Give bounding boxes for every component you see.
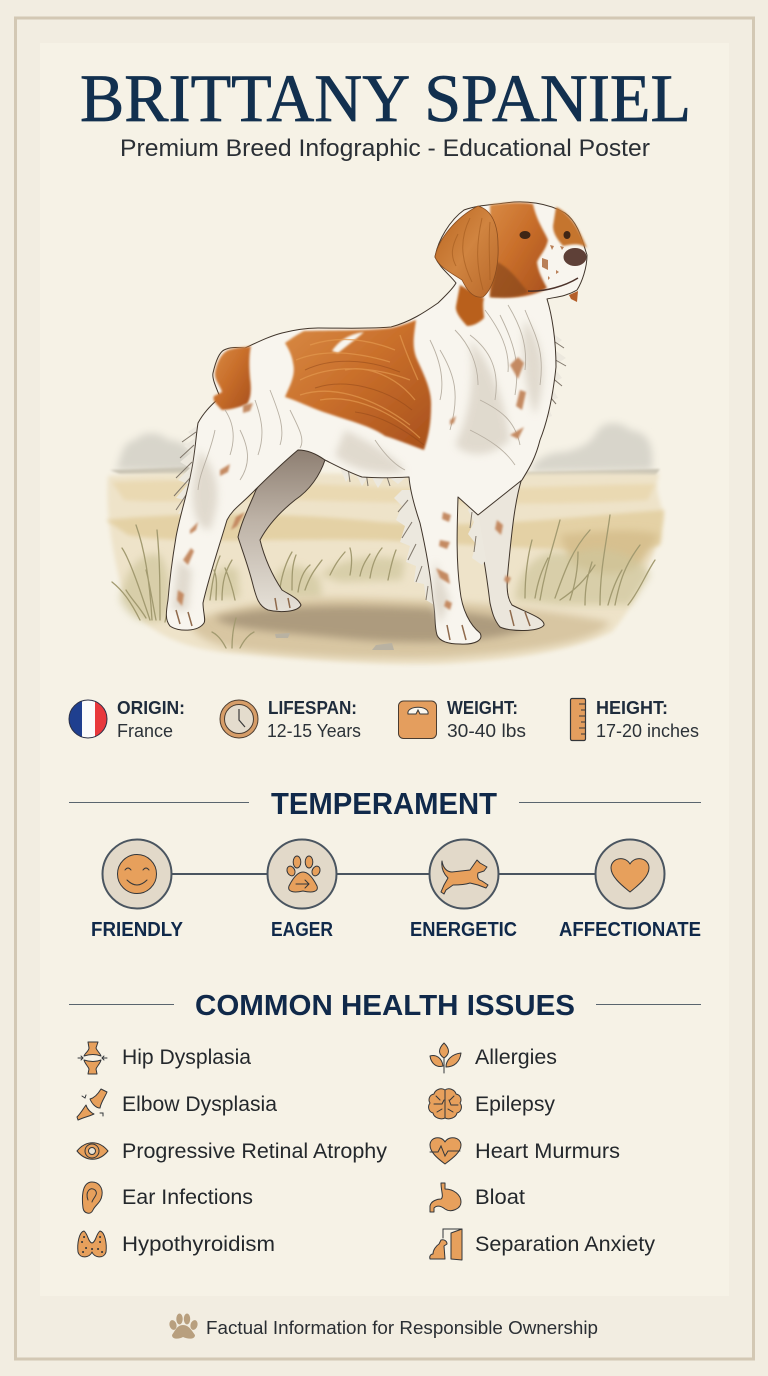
dog xyxy=(166,202,587,644)
origin text: ORIGIN: xyxy=(117,698,185,718)
far hind leg xyxy=(238,445,325,612)
icon: scale xyxy=(398,701,436,738)
white fur strokes xyxy=(198,305,541,490)
saddle fur strokes xyxy=(296,335,420,438)
far foreleg xyxy=(468,478,544,631)
label: Bloat xyxy=(475,1186,525,1209)
mouth xyxy=(528,278,578,291)
label: Hip Dysplasia xyxy=(122,1046,251,1069)
issue: ear infections xyxy=(82,1182,253,1213)
ear xyxy=(435,206,498,297)
distant trees xyxy=(116,423,653,472)
label: FRIENDLY xyxy=(91,919,184,941)
origin fact xyxy=(68,700,184,738)
icon: paw xyxy=(168,1314,199,1339)
temperament row xyxy=(91,840,701,941)
issue: heart murmurs xyxy=(430,1138,620,1164)
weight text: 30-40 lbs xyxy=(447,721,526,741)
origin text xyxy=(117,698,185,741)
ground wash xyxy=(106,473,664,664)
label: EAGER xyxy=(271,919,333,941)
label: Epilepsy xyxy=(475,1093,555,1116)
right brow patch xyxy=(553,207,587,248)
issue: elbow dysplasia xyxy=(77,1089,277,1120)
label: AFFECTIONATE xyxy=(559,919,701,941)
issue: epilepsy xyxy=(429,1089,555,1119)
icon: eye xyxy=(77,1143,108,1159)
icon: elbow joint xyxy=(77,1089,107,1120)
issue: bloat xyxy=(430,1183,525,1212)
issue: hip dysplasia xyxy=(78,1042,251,1074)
rump and tail patch xyxy=(213,346,251,410)
label: Allergies xyxy=(475,1046,557,1069)
icon: brain xyxy=(429,1089,461,1119)
trait: affectionate xyxy=(559,840,701,941)
pebbles xyxy=(275,633,394,650)
eyes xyxy=(520,231,530,239)
weight text: WEIGHT: xyxy=(447,698,518,718)
body silhouette xyxy=(166,202,587,644)
ear fur strokes xyxy=(452,218,490,290)
title: BRITTANY SPANIEL xyxy=(80,60,691,136)
soft coat shading xyxy=(172,320,543,625)
label: Elbow Dysplasia xyxy=(122,1093,277,1116)
muzzle freckles xyxy=(542,245,564,280)
issue: separation anxiety xyxy=(430,1229,656,1260)
neck patch xyxy=(456,285,484,326)
jaw shade xyxy=(490,262,528,297)
height text: HEIGHT: xyxy=(596,698,668,718)
icon: running dog xyxy=(430,840,498,908)
label: Separation Anxiety xyxy=(475,1233,656,1256)
trait: energetic xyxy=(410,840,517,941)
lifespan text: 12-15 Years xyxy=(267,721,361,741)
label: Progressive Retinal Atrophy xyxy=(122,1140,387,1163)
footer xyxy=(168,1314,598,1339)
head orange xyxy=(490,203,548,298)
icon: hip joint xyxy=(78,1042,107,1074)
issue: hypothyroidism xyxy=(78,1231,275,1257)
height fact xyxy=(570,698,699,741)
icon: heart with pulse xyxy=(430,1138,461,1164)
issue: allergies xyxy=(430,1043,557,1073)
icon: smiling face xyxy=(102,840,172,908)
heading: common health issues: COMMON HEALTH ISSUES xyxy=(195,990,575,1022)
height text: 17-20 inches xyxy=(596,721,699,741)
label: Ear Infections xyxy=(122,1186,253,1209)
illustration: Brittany spaniel in a field xyxy=(106,202,664,664)
icon: leaves xyxy=(430,1043,461,1073)
trait: friendly xyxy=(91,840,184,941)
lifespan fact xyxy=(220,698,361,741)
white feather fringes xyxy=(176,330,566,606)
icon: dog at door xyxy=(430,1229,462,1260)
grass xyxy=(112,515,655,648)
origin text: France xyxy=(117,721,173,741)
subtitle: Premium Breed Infographic - Educational Poster xyxy=(120,135,650,162)
footer text: Factual Information for Responsible Ownership xyxy=(206,1317,598,1338)
label: ENERGETIC xyxy=(410,919,517,941)
toes xyxy=(176,598,530,640)
icon: French flag xyxy=(69,700,109,738)
lifespan text xyxy=(267,698,361,741)
label: Heart Murmurs xyxy=(475,1140,620,1163)
icon: thyroid xyxy=(78,1231,106,1257)
label: Hypothyroidism xyxy=(122,1233,275,1256)
coat spots xyxy=(177,357,526,610)
issue: progressive retinal atrophy xyxy=(77,1140,387,1163)
fringe fine strokes xyxy=(174,340,566,600)
icon: ruler xyxy=(570,698,586,740)
grass tuft shades xyxy=(120,549,650,622)
lifespan text: LIFESPAN: xyxy=(268,698,357,718)
nose xyxy=(564,248,586,266)
trait: eager xyxy=(268,840,336,941)
saddle patch xyxy=(285,320,431,450)
icon: clock xyxy=(220,700,258,738)
ground shadow xyxy=(190,598,610,658)
icon: heart xyxy=(596,840,664,908)
weight fact xyxy=(398,698,526,741)
weight text xyxy=(447,698,526,741)
fact row xyxy=(69,698,699,741)
icon: ear xyxy=(82,1182,102,1213)
icon: paw with arrow xyxy=(268,840,336,908)
horizon strip xyxy=(110,467,660,477)
heading: temperament: TEMPERAMENT xyxy=(271,786,497,821)
white saddle spot xyxy=(332,332,364,353)
tongue xyxy=(569,291,578,302)
icon: stomach xyxy=(430,1183,461,1212)
height text xyxy=(596,698,699,741)
health issues left column xyxy=(77,1042,387,1257)
health issues right column xyxy=(429,1043,656,1260)
